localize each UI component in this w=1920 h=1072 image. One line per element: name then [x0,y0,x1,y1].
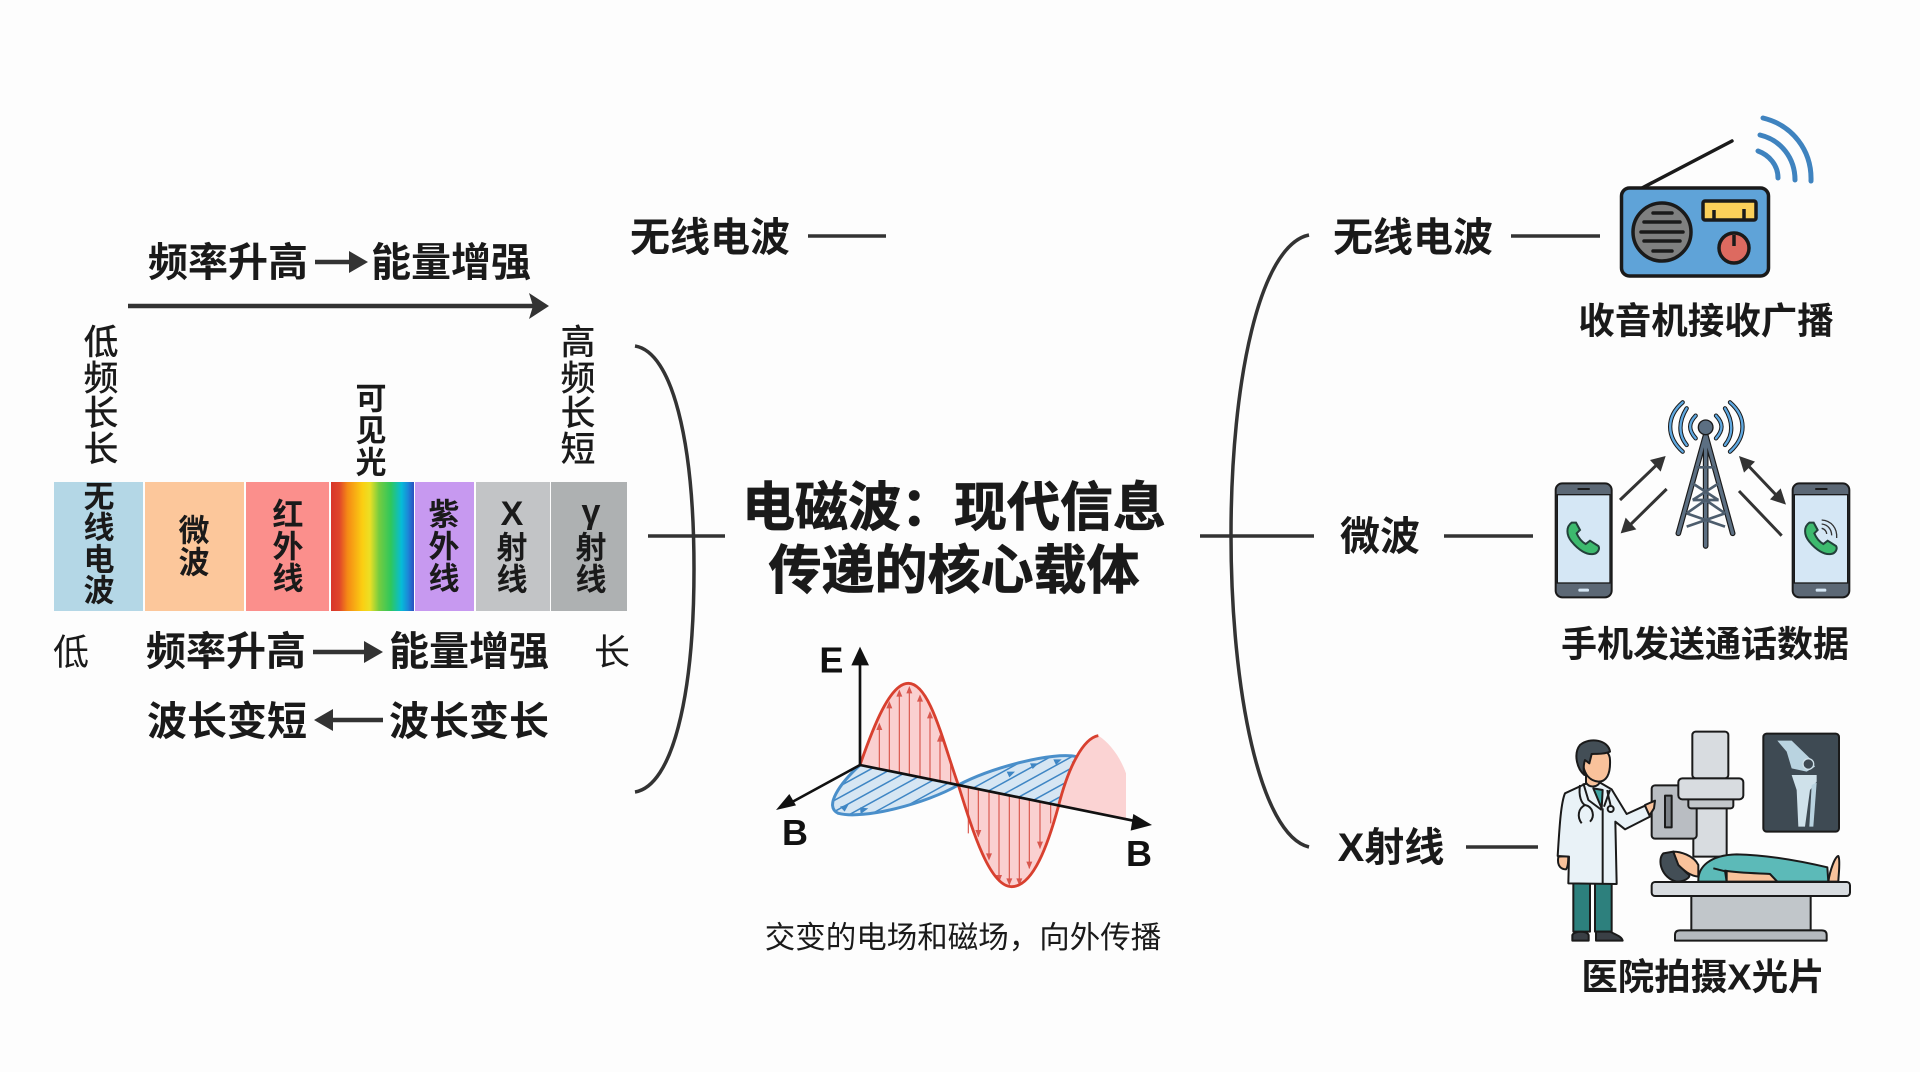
heading: frequency rises, energy grows [148,241,531,285]
label: low frequency long wavelength: 长 [83,394,119,434]
doctor [1558,740,1655,941]
label: visible light: 可 [356,382,386,416]
segment: microwave: 微 [178,514,210,548]
segment: ultraviolet: 线 [428,562,460,596]
segment: radio waves: 线 [84,510,114,546]
text row: frequency rises, energy grows [146,630,549,674]
right bracket [1200,235,1314,847]
text row: wavelength shortens and lengthens: 波长变短 [147,700,307,744]
arrow: frequency direction [128,293,549,319]
magnetic field lobes [831,754,1076,816]
text row: frequency rises, energy grows: 频率升高 [146,630,306,674]
segment: X-ray [476,482,550,611]
tower [1670,402,1742,546]
icon: radio [1622,118,1811,276]
title: 电磁波：现代信息 [742,478,1166,538]
text row: wavelength shortens and lengthens [147,700,549,744]
icon: X-ray scene [1558,732,1850,941]
segment: infrared: 外 [272,530,304,564]
label: low frequency long wavelength: 频 [83,360,119,398]
label: high frequency short wavelength: 频 [560,360,596,398]
X-ray film [1763,734,1839,832]
branch: radio waves: 无线电波 [1333,216,1493,260]
label: visible light: 光 [356,446,386,480]
segment: X-ray: 射 [496,530,528,566]
caption: radio: 收音机接收广播 [1578,300,1834,342]
segment: ultraviolet [415,482,474,611]
label: low frequency long wavelength [83,324,119,470]
text row: wavelength shortens and lengthens: 波长变长 [389,700,549,744]
label: high frequency short wavelength: 长 [560,394,596,434]
label: visible light: 见 [356,414,386,448]
icon: phones and tower [1556,402,1849,597]
segment: ultraviolet: 外 [428,530,460,564]
text row: frequency rises, energy grows: 能量增强 [389,630,549,674]
axis labels [782,639,1152,874]
label: low frequency long wavelength: 长 [83,430,119,470]
segment: infrared: 红 [272,498,304,532]
axes [787,660,1138,822]
top left label: radio waves: 无线电波 [630,216,790,260]
segment: infrared [246,482,329,611]
right phone [1793,483,1849,597]
segment: infrared: 线 [272,562,304,596]
label: low frequency long wavelength: 低 [83,324,119,362]
segment: X-ray: X [501,495,524,533]
segment: visible rainbow [331,482,414,611]
title: 传递的核心载体 [768,542,1140,600]
heading: frequency rises, energy grows: 能量增强 [371,241,531,285]
segment: X-ray: 线 [496,562,528,598]
segment: radio waves: 波 [84,574,114,608]
segment: gamma ray: 射 [576,530,606,566]
branch: microwave: 微波 [1340,515,1420,559]
segment: radio waves [54,480,143,611]
segment: microwave: 波 [178,546,210,580]
caption: phones: 手机发送通话数据 [1561,624,1849,664]
label: visible light [356,382,386,480]
segment: radio waves: 电 [84,542,114,578]
wave caption: 交变的电场和磁场，向外传播 [765,921,1161,955]
heading: frequency rises, energy grows: 频率升高 [148,241,308,285]
label: high frequency short wavelength [560,324,596,470]
axis labels: B [782,812,808,853]
electric field wave [860,683,1126,887]
segment: ultraviolet: 紫 [428,498,460,532]
spectrum bar [54,480,627,611]
wave diagram [762,639,1152,887]
segment: gamma ray: 线 [576,562,606,598]
label: high frequency short wavelength: 高 [560,324,596,362]
signal arrows [1620,456,1786,536]
axis end label: low: 低 [53,632,89,672]
patient and table [1652,852,1850,941]
segment: gamma ray [551,482,627,611]
caption: X-ray: 医院拍摄X光片 [1581,956,1825,998]
left bracket [635,346,725,792]
label: high frequency short wavelength: 短 [560,430,596,470]
segment: gamma ray: γ [582,493,601,531]
axis end label: long: 长 [594,632,630,672]
segment: microwave [145,482,244,611]
left phone [1556,483,1612,597]
segment: radio waves: 无 [84,480,114,514]
branch: X-ray: X射线 [1338,826,1444,870]
machine [1652,732,1743,857]
axis labels: B [1126,833,1152,874]
axis labels: E [819,639,843,680]
title [742,478,1166,600]
